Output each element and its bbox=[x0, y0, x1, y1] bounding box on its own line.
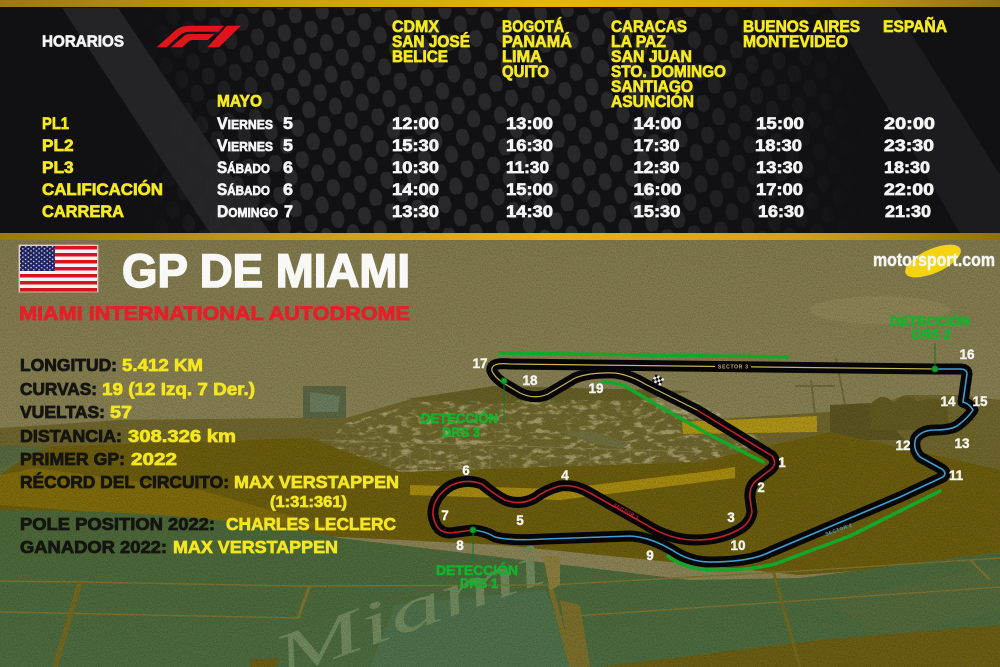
session times table: 15:30 bbox=[634, 202, 680, 221]
turn numbers: 8 bbox=[456, 538, 464, 553]
session times table: 15:00 bbox=[756, 114, 804, 133]
heading: horarios: HORARIOS bbox=[42, 34, 124, 50]
DRS detection labels: DRS 2 bbox=[912, 326, 951, 342]
column headers: cities: ESPAÑA bbox=[883, 16, 947, 36]
DRS detection labels: DRS 1 bbox=[460, 575, 498, 591]
session dates: VIERNES bbox=[217, 114, 273, 133]
icon: F1 logo bbox=[157, 26, 241, 47]
sector 3 line bbox=[492, 364, 935, 410]
session times table: 14:00 bbox=[392, 180, 439, 199]
panel: circuit background photo bbox=[0, 240, 1000, 667]
session dates: 5 bbox=[283, 114, 293, 133]
session times table: 14:30 bbox=[506, 202, 553, 221]
session times table: 18:30 bbox=[884, 158, 930, 177]
circuit facts: MAX VERSTAPPEN bbox=[173, 537, 338, 557]
circuit facts: LONGITUD: bbox=[20, 355, 117, 375]
session times table: 12:00 bbox=[392, 114, 439, 133]
session dates: DOMINGO bbox=[217, 202, 278, 221]
session times table: 14:00 bbox=[634, 114, 682, 133]
grandstands bbox=[0, 386, 1000, 472]
session dates bbox=[217, 114, 293, 221]
turn numbers: 2 bbox=[757, 480, 765, 495]
column headers: cities: CDMX bbox=[392, 18, 439, 36]
turn numbers: 7 bbox=[441, 508, 449, 523]
session dates: 6 bbox=[283, 180, 293, 199]
turn numbers: 18 bbox=[522, 373, 538, 388]
circuit facts: 57 bbox=[110, 402, 132, 422]
turn numbers: 14 bbox=[940, 394, 956, 409]
subtitle: circuit name: MIAMI INTERNATIONAL AUTODROME bbox=[19, 303, 410, 325]
turn numbers: 1 bbox=[778, 455, 786, 470]
session labels: PL1 bbox=[42, 114, 69, 133]
circuit facts: 2022 bbox=[131, 449, 177, 469]
circuit facts: GANADOR 2022: bbox=[20, 537, 167, 557]
column headers: cities: BOGOTÁ bbox=[502, 17, 564, 36]
session dates: 6 bbox=[283, 158, 293, 177]
column headers: cities: LIMA bbox=[502, 48, 542, 66]
track outline bbox=[433, 364, 973, 562]
column headers: cities: ASUNCIÓN bbox=[611, 92, 694, 111]
session times table: 15:00 bbox=[506, 180, 553, 199]
session dates: SÁBADO bbox=[217, 180, 270, 199]
column headers: cities: PANAMÁ bbox=[502, 32, 572, 51]
circuit facts: RÉCORD DEL CIRCUITO: bbox=[20, 471, 229, 492]
circuit facts: PRIMER GP: bbox=[20, 449, 125, 469]
icon: US flag bbox=[19, 245, 98, 292]
session times table: 18:30 bbox=[755, 136, 802, 155]
turn numbers: 16 bbox=[959, 347, 975, 362]
title: GP de Miami: GP DE MIAMI bbox=[122, 244, 410, 297]
DRS detection labels: DETECCIÓN bbox=[421, 409, 498, 426]
circuit facts bbox=[20, 355, 399, 557]
turn numbers: 5 bbox=[516, 513, 524, 528]
sector 2 line bbox=[473, 369, 973, 562]
column headers: cities: SANTIAGO bbox=[611, 78, 693, 96]
session times table: 23:30 bbox=[884, 136, 934, 155]
turn numbers: 15 bbox=[972, 394, 988, 409]
session dates: SÁBADO bbox=[217, 158, 270, 177]
turn numbers: 10 bbox=[730, 538, 746, 553]
circuit facts: CURVAS: bbox=[20, 379, 97, 399]
session dates: 5 bbox=[283, 136, 293, 155]
turn numbers: 6 bbox=[462, 463, 470, 478]
icon: chequered flag bbox=[652, 374, 664, 386]
session times table: 16:30 bbox=[506, 136, 553, 155]
column headers: cities: BELICE bbox=[392, 48, 448, 66]
circuit facts: VUELTAS: bbox=[20, 402, 105, 422]
column headers: cities: CARACAS bbox=[611, 18, 687, 36]
column headers: cities: LA PAZ bbox=[611, 33, 666, 51]
DRS detection labels bbox=[421, 312, 970, 591]
session times table: 16:00 bbox=[634, 180, 682, 199]
session dates: VIERNES bbox=[217, 136, 273, 155]
circuit facts: 5.412 KM bbox=[122, 355, 203, 375]
session times table: 20:00 bbox=[884, 114, 935, 133]
column headers: cities bbox=[217, 16, 947, 111]
panel: schedule bbox=[0, 0, 1000, 240]
circuit facts: 19 (12 Izq. 7 Der.) bbox=[102, 379, 255, 399]
sector 1 line bbox=[433, 410, 775, 540]
circuit facts: (1:31:361) bbox=[270, 494, 347, 511]
turn numbers: 11 bbox=[949, 468, 964, 483]
turn numbers bbox=[441, 347, 988, 563]
session times table: 22:00 bbox=[884, 180, 934, 199]
sector labels: SECTOR 3 bbox=[718, 364, 748, 370]
session times table: 17:30 bbox=[634, 136, 680, 155]
sky fittings: gondola poles and sign bbox=[303, 358, 845, 420]
DRS detection labels: DETECCIÓN bbox=[436, 561, 518, 578]
session dates: 7 bbox=[284, 202, 293, 221]
column headers: cities: STO. DOMINGO bbox=[611, 63, 726, 81]
session times table: 16:30 bbox=[758, 202, 804, 221]
session times table: 11:30 bbox=[506, 158, 549, 177]
column headers: cities: QUITO bbox=[502, 63, 549, 81]
DRS detection labels: DRS 3 bbox=[442, 424, 480, 440]
session labels: CARRERA bbox=[42, 202, 124, 221]
column headers: cities: MONTEVIDEO bbox=[743, 33, 848, 51]
circuit map bbox=[421, 312, 988, 591]
circuit facts: CHARLES LECLERC bbox=[226, 514, 396, 534]
sector labels: SECTOR 2 bbox=[825, 523, 853, 538]
turn numbers: 4 bbox=[561, 468, 569, 483]
column headers: cities: SAN JOSÉ bbox=[392, 32, 470, 51]
session times table: 13:30 bbox=[756, 158, 803, 177]
session labels bbox=[42, 114, 163, 221]
circuit facts: 308.326 km bbox=[128, 426, 236, 446]
session labels: PL3 bbox=[42, 158, 74, 177]
turn numbers: 9 bbox=[646, 548, 654, 563]
session times table: 13:00 bbox=[506, 114, 553, 133]
session labels: CALIFICACIÓN bbox=[42, 180, 163, 199]
session times table bbox=[392, 114, 935, 221]
session times table: 13:30 bbox=[392, 202, 439, 221]
sector labels: SECTOR 1 bbox=[612, 502, 640, 521]
circuit facts: MAX VERSTAPPEN bbox=[234, 472, 399, 492]
turn numbers: 13 bbox=[954, 436, 970, 451]
session times table: 10:30 bbox=[392, 158, 439, 177]
DRS zones bbox=[500, 353, 940, 570]
column headers: cities: BUENOS AIRES bbox=[743, 18, 860, 36]
session times table: 21:30 bbox=[885, 202, 931, 221]
turn numbers: 17 bbox=[472, 356, 488, 371]
session times table: 12:30 bbox=[634, 158, 680, 177]
circuit facts: POLE POSITION 2022: bbox=[20, 514, 215, 534]
session labels: PL2 bbox=[42, 136, 74, 155]
pirelli banner bbox=[410, 467, 735, 500]
column headers: cities: SAN JUAN bbox=[611, 48, 692, 66]
circuit facts: DISTANCIA: bbox=[20, 426, 122, 446]
column headers: cities: MAYO bbox=[217, 92, 262, 110]
turn numbers: 12 bbox=[895, 438, 911, 453]
turn numbers: 19 bbox=[588, 381, 604, 396]
sector labels bbox=[612, 362, 853, 538]
DRS detection labels: DETECCIÓN bbox=[890, 312, 970, 329]
session times table: 17:00 bbox=[756, 180, 803, 199]
session times table: 15:30 bbox=[392, 136, 439, 155]
DRS detection markers bbox=[470, 343, 938, 562]
logo: motorsport.com bbox=[873, 238, 995, 284]
turn numbers: 3 bbox=[727, 510, 735, 525]
